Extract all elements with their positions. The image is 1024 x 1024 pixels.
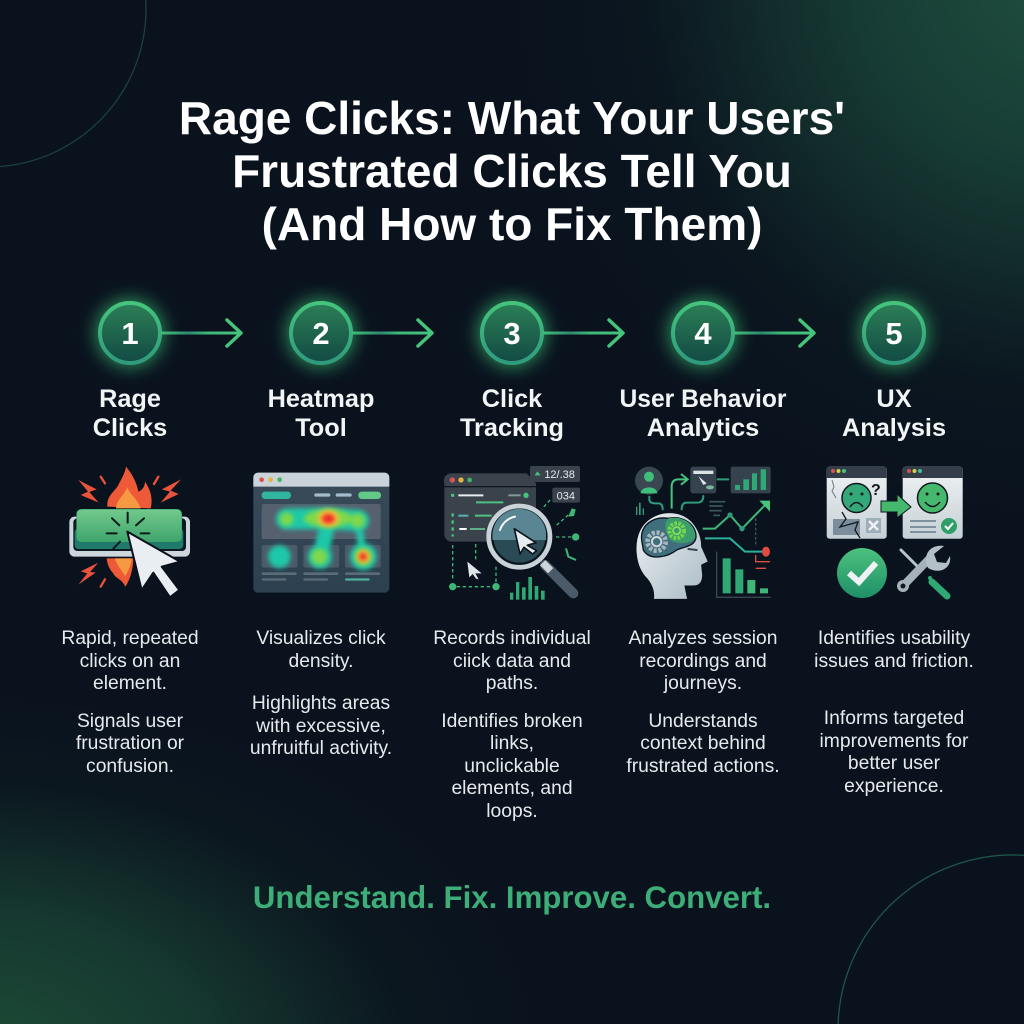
step 3 number badge: 3: [503, 316, 521, 351]
icon: UX analysis before and after windows with check and tools: [827, 466, 963, 598]
heading: Click Tracking: Tracking: [460, 414, 564, 442]
title: Rage Clicks: What Your Users': [179, 92, 845, 144]
heading: User Behavior Analytics: User Behavior: [620, 385, 787, 413]
title: (And How to Fix Them): [262, 198, 762, 250]
body text: User Behavior Analytics: frustrated actions.: [626, 756, 780, 777]
body text: Rage Clicks: Rapid, repeated: [61, 628, 199, 649]
heading: Click Tracking: [460, 385, 564, 442]
body text: Click Tracking: loops.: [486, 801, 538, 822]
icon: click tracking dashboard with magnifier: 12/.38: [544, 469, 575, 481]
step 2 number badge: [287, 299, 355, 367]
heading: User Behavior Analytics: Analytics: [647, 414, 759, 442]
heading: User Behavior Analytics: [620, 385, 787, 442]
body text: Rage Clicks: confusion.: [86, 756, 174, 777]
heading: UX Analysis: UX: [876, 385, 912, 413]
arrow: step 4 to 5: [734, 320, 814, 346]
body text: Heatmap Tool: [250, 628, 392, 759]
icon: UX analysis before and after windows with check and tools: ?: [871, 482, 881, 499]
body text: Heatmap Tool: Highlights areas: [252, 693, 390, 714]
body text: Click Tracking: Records individual: [433, 628, 591, 649]
body text: UX Analysis: Identifies usability: [818, 628, 970, 649]
body text: Click Tracking: elements, and: [451, 778, 573, 799]
arrow: step 2 to 3: [352, 320, 432, 346]
body text: User Behavior Analytics: Understands: [648, 711, 758, 732]
title: Frustrated Clicks Tell You: [232, 145, 792, 197]
icon: click tracking dashboard with magnifier: [444, 466, 580, 600]
body text: Rage Clicks: frustration or: [76, 733, 185, 754]
decorative corner arc: bottom right: [838, 855, 1024, 1024]
icon: brain analytics head with charts: [635, 467, 771, 599]
body text: Rage Clicks: element.: [93, 673, 167, 694]
heading: Heatmap Tool: [268, 385, 374, 442]
step 2 number badge: 2: [312, 316, 330, 351]
body text: Click Tracking: Identifies broken: [441, 711, 583, 732]
body text: UX Analysis: Informs targeted: [824, 708, 964, 729]
step 5 number badge: 5: [885, 316, 903, 351]
body text: Heatmap Tool: unfruitful activity.: [250, 738, 392, 759]
body text: Heatmap Tool: Visualizes click: [256, 628, 386, 649]
heading: Heatmap Tool: Tool: [295, 414, 347, 442]
heading: Click Tracking: Click: [482, 385, 543, 413]
heading: Heatmap Tool: Heatmap: [268, 385, 374, 413]
body text: Click Tracking: unclickable: [464, 756, 560, 777]
step 3 number badge: [478, 299, 546, 367]
decorative corner arc: top left: [0, 0, 146, 166]
step 4 number badge: 4: [694, 316, 712, 351]
arrow: step 1 to 2: [161, 320, 241, 346]
body text: UX Analysis: issues and friction.: [814, 651, 974, 672]
body text: Rage Clicks: clicks on an: [80, 651, 180, 672]
body text: User Behavior Analytics: [626, 628, 780, 777]
step 4 number badge: [669, 299, 737, 367]
body text: User Behavior Analytics: recordings and: [639, 651, 767, 672]
body text: User Behavior Analytics: journeys.: [663, 673, 742, 694]
heading: UX Analysis: [842, 385, 946, 442]
step 1 number badge: [96, 299, 164, 367]
body text: Heatmap Tool: density.: [288, 651, 354, 672]
body text: Click Tracking: links,: [490, 733, 534, 754]
body text: Heatmap Tool: with excessive,: [255, 716, 386, 737]
step 5 number badge: [860, 299, 928, 367]
body text: UX Analysis: better user: [848, 753, 941, 774]
icon: rage click button with flame and cursor: [69, 467, 190, 597]
arrow: step 3 to 4: [543, 320, 623, 346]
body text: Rage Clicks: Signals user: [77, 711, 184, 732]
heading: UX Analysis: Analysis: [842, 414, 946, 442]
heading: Rage Clicks: Clicks: [93, 414, 167, 442]
body text: UX Analysis: experience.: [844, 776, 944, 797]
heading: Rage Clicks: Rage: [99, 385, 161, 413]
body text: UX Analysis: [814, 628, 974, 797]
body text: Rage Clicks: [61, 628, 199, 777]
icon: click tracking dashboard with magnifier: 034: [557, 490, 575, 502]
body text: Click Tracking: [433, 628, 591, 822]
title: [179, 92, 845, 250]
body text: UX Analysis: improvements for: [820, 731, 969, 752]
body text: User Behavior Analytics: Analyzes session: [629, 628, 777, 649]
body text: User Behavior Analytics: context behind: [640, 733, 766, 754]
body text: Click Tracking: paths.: [486, 673, 538, 694]
footer tagline: Understand. Fix. Improve. Convert.: [253, 880, 771, 915]
heading: Rage Clicks: [93, 385, 167, 442]
body text: Click Tracking: ciick data and: [453, 651, 571, 672]
step 1 number badge: 1: [121, 316, 139, 351]
icon: heatmap browser window: [253, 473, 389, 593]
